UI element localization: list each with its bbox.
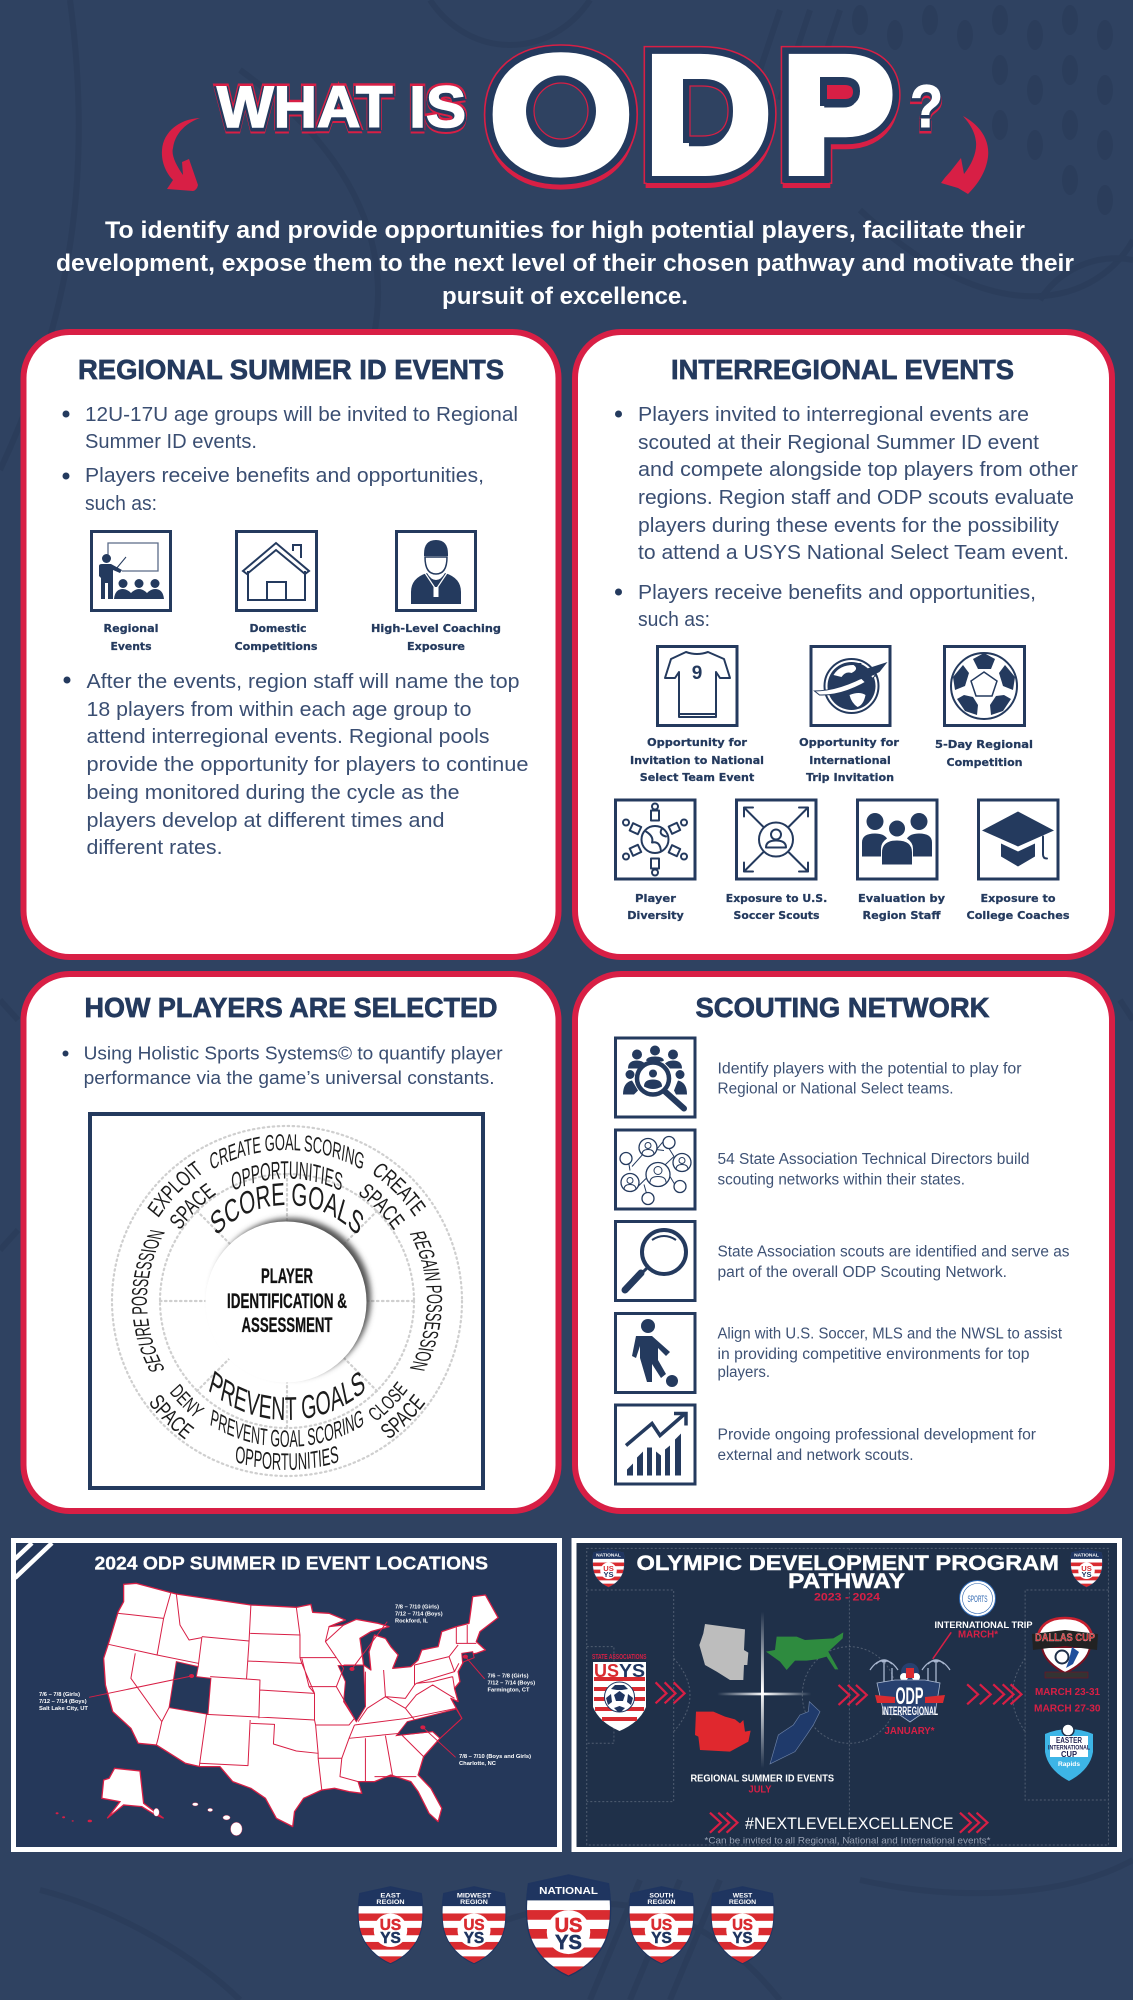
text: march dates: MARCH 23-31 — [1035, 1686, 1100, 1698]
badge: south region — [628, 1886, 695, 1964]
letter counters — [526, 76, 860, 146]
title: what is: WHAT IS — [217, 77, 466, 142]
diagram: player identification wheel — [88, 1112, 485, 1490]
label: 5-Day Regional — [935, 739, 1033, 751]
callout: salt lake city: 7/12 – 7/14 (Boys) — [39, 1699, 87, 1705]
badge: south region: US — [651, 1917, 672, 1934]
icon: regional events — [92, 532, 170, 610]
label: Exposure — [407, 641, 465, 653]
label: Exposure to — [980, 893, 1056, 905]
state associations shield: US — [594, 1661, 619, 1681]
ring labels: SPACE — [170, 1182, 216, 1228]
title: question mark: ? — [910, 73, 943, 140]
pathway title: PATHWAY — [788, 1570, 905, 1593]
label: College Coaches — [966, 910, 1070, 922]
callout: rockford: 7/8 – 7/10 (Girls) — [395, 1604, 439, 1610]
badge: national left — [592, 1549, 625, 1588]
title: ODP: P — [784, 25, 892, 204]
ring labels: OPPORTUNITIES — [232, 1161, 342, 1190]
bullet text — [62, 1044, 503, 1088]
ring labels: EXPLOIT — [147, 1160, 202, 1218]
ring labels: SPACE — [381, 1394, 426, 1438]
bullet text bottom: 18 players from within each age group to — [86, 698, 472, 721]
text — [718, 1426, 1036, 1464]
text: in providing competitive environments for top — [718, 1346, 1030, 1363]
ring labels — [132, 1134, 442, 1470]
bullet list: scouted at their Regional Summer ID event — [638, 431, 1039, 454]
label: Opportunity for — [799, 737, 900, 749]
badge: national — [525, 1874, 612, 1977]
bullet list top: such as: — [85, 492, 157, 515]
bullet text bottom: being monitored during the cycle as the — [86, 781, 460, 804]
title: ODP: O — [492, 25, 630, 204]
label — [858, 893, 945, 922]
callout: rockford: Rockford, IL — [395, 1618, 429, 1624]
logo: easter international cup: Rapids — [1058, 1761, 1080, 1768]
state associations shield: YS — [619, 1661, 645, 1681]
mission statement: To identify and provide opportunities for high potential players, facilitate their — [105, 217, 1025, 244]
heading: INTERREGIONAL EVENTS — [671, 354, 1014, 385]
bullet list: Players receive benefits and opportunities, — [638, 581, 1036, 604]
badge: midwest region: YS — [464, 1930, 484, 1947]
label: Region Staff — [862, 910, 941, 922]
bullet list: players during these events for the possibility — [638, 514, 1060, 537]
badge: national right: YS — [1081, 1570, 1092, 1579]
logo: easter international cup: CUP — [1061, 1750, 1078, 1759]
bullet list: and compete alongside top players from other — [638, 458, 1078, 481]
bullet list top: Players receive benefits and opportunities, — [85, 464, 484, 487]
icon: international trip — [811, 646, 890, 726]
heading: REGIONAL SUMMER ID EVENTS — [78, 354, 504, 385]
bullet text bottom: attend interregional events. Regional pools — [86, 725, 489, 748]
field lines and chevrons — [587, 1548, 1108, 1845]
bullet list: Players invited to interregional events are — [638, 403, 1029, 426]
badge: east region: YS — [380, 1930, 401, 1947]
label — [799, 737, 900, 784]
text: international trip: INTERNATIONAL TRIP — [934, 1620, 1032, 1630]
title: ODP — [492, 25, 892, 210]
badge: midwest region: MIDWEST — [457, 1892, 491, 1899]
ring labels: CREATE GOAL SCORING — [210, 1134, 364, 1168]
callout: farmington: 7/12 – 7/14 (Boys) — [488, 1680, 535, 1686]
text: march dates — [1034, 1686, 1101, 1714]
arrow: right — [941, 116, 988, 194]
bullet text bottom: After the events, region staff will name the top — [86, 670, 520, 693]
logo: easter international cup: EASTER — [1056, 1736, 1082, 1745]
badge: national left: US — [603, 1564, 614, 1573]
icon: player diversity — [616, 800, 695, 879]
bullet text bottom: players develop at different times and — [86, 809, 445, 832]
badge: west region — [710, 1886, 775, 1964]
icon: soccer ball — [944, 646, 1024, 726]
label: International — [809, 755, 891, 767]
ring labels: CLOSE — [369, 1381, 408, 1420]
label: Events — [110, 641, 152, 653]
icon: jersey — [658, 646, 737, 726]
icon: magnifying glass — [616, 1222, 695, 1300]
title: ODP: P — [784, 31, 892, 210]
US map — [56, 1583, 498, 1836]
ring labels: PREVENT GOALS — [209, 1370, 364, 1420]
title: ODP: D — [647, 25, 769, 204]
icon: high-level coaching — [396, 532, 476, 610]
title: ODP: D — [647, 25, 769, 204]
icon: player kicking — [616, 1314, 695, 1392]
mission statement: pursuit of excellence. — [442, 283, 688, 310]
text — [718, 1326, 1063, 1381]
logo: sports badge: SPORTS — [968, 1594, 988, 1604]
state associations shield — [592, 1654, 647, 1731]
title: ODP: P — [784, 25, 892, 204]
icon: exposure to scouts — [736, 800, 816, 879]
title: ODP: D — [647, 31, 769, 210]
date: 2023 - 2024 — [814, 1592, 881, 1604]
badge: east region: REGION — [376, 1899, 405, 1906]
title: question mark: ? — [910, 77, 943, 144]
text: regional summer id — [690, 1772, 834, 1796]
icon: identify players — [616, 1038, 695, 1117]
callout: charlotte: 7/8 – 7/10 (Boys and Girls) — [459, 1754, 531, 1760]
badge: west region: REGION — [729, 1899, 756, 1906]
logo: easter international cup: INTERNATIONAL — [1048, 1744, 1090, 1752]
title: ODP: D — [647, 25, 769, 204]
callout lines — [89, 1622, 485, 1757]
text — [718, 1151, 1030, 1188]
badge: midwest region: US — [463, 1917, 485, 1934]
ring labels: SPACE — [150, 1395, 194, 1440]
label: Competitions — [234, 641, 318, 653]
footnote: *Can be invited to all Regional, National and International events* — [704, 1836, 991, 1846]
text: regional summer id: REGIONAL SUMMER ID EVENTS — [690, 1772, 834, 1784]
heading: SCOUTING NETWORK — [696, 992, 990, 1023]
label — [935, 739, 1033, 769]
badge: national: US — [555, 1915, 582, 1937]
badge: south region: YS — [651, 1930, 672, 1947]
bullet text: performance via the game’s universal constants. — [84, 1068, 495, 1088]
text: Provide ongoing professional development for — [718, 1426, 1036, 1444]
logo: easter international cup — [1045, 1724, 1093, 1781]
title: question mark: ? — [910, 75, 943, 142]
state associations shield: STATE ASSOCIATIONS — [592, 1654, 647, 1661]
title: ODP: O — [492, 27, 630, 206]
ring labels: SPACE — [360, 1184, 406, 1230]
badge: national: YS — [555, 1932, 582, 1954]
text: march dates: MARCH 27-30 — [1034, 1702, 1101, 1714]
badge: east region: US — [380, 1917, 401, 1934]
text: 54 State Association Technical Directors build — [718, 1151, 1030, 1168]
corner stripe marks — [15, 1543, 52, 1578]
logo: odp interregional: ODP — [896, 1683, 924, 1710]
center text: PLAYER — [261, 1265, 313, 1288]
center text: IDENTIFICATION & — [227, 1290, 347, 1313]
label: Select Team Event — [640, 772, 754, 784]
region badges — [357, 1874, 775, 1977]
title: ODP: O — [492, 25, 630, 204]
label: Trip Invitation — [806, 772, 894, 784]
mission statement: development, expose them to the next level of their chosen pathway and motivate their — [56, 250, 1074, 277]
panel: olympic development program pathway — [574, 1540, 1120, 1850]
callout: salt lake city — [39, 1692, 89, 1712]
panel: regional summer id events — [24, 332, 558, 957]
callout: farmington: Farmington, CT — [488, 1688, 530, 1694]
label: Invitation to National — [630, 755, 764, 767]
icon: evaluation by region staff — [858, 800, 937, 879]
logo: dallas cup: DALLAS CUP — [1035, 1632, 1095, 1644]
badge: national: NATIONAL — [539, 1885, 599, 1897]
badge: south region: SOUTH — [649, 1892, 674, 1899]
badge: national left: NATIONAL — [596, 1553, 621, 1559]
bullet text bottom — [64, 670, 528, 859]
icon: scouting network — [616, 1130, 695, 1209]
label — [234, 623, 318, 653]
center text: ASSESSMENT — [242, 1314, 333, 1337]
bullet list: such as: — [638, 608, 710, 631]
badge: east region — [357, 1886, 424, 1964]
logo: dallas cup — [1032, 1618, 1098, 1678]
text: Align with U.S. Soccer, MLS and the NWSL to assist — [718, 1326, 1063, 1342]
title: what is: WHAT IS — [217, 79, 466, 144]
text: international trip — [934, 1620, 1032, 1640]
mission statement — [56, 217, 1074, 310]
panel: how players are selected — [20, 971, 562, 1514]
ring labels: OPPORTUNITIES — [236, 1446, 338, 1470]
logo: odp interregional — [870, 1660, 950, 1737]
ring labels: REGAIN POSSESSION — [410, 1231, 442, 1371]
callout: farmington: 7/6 – 7/8 (Girls) — [488, 1674, 529, 1680]
icon: domestic competitions — [236, 532, 316, 610]
label — [726, 893, 827, 922]
text — [718, 1244, 1070, 1281]
ring labels: DENY — [170, 1384, 205, 1416]
label — [966, 893, 1070, 922]
ring labels: CREATE — [374, 1164, 426, 1217]
badge: midwest region: REGION — [460, 1899, 488, 1906]
callout: charlotte — [459, 1754, 531, 1767]
title: what is: WHAT IS — [217, 75, 466, 140]
icon: jersey: 9 — [692, 663, 702, 684]
label: Exposure to U.S. — [726, 893, 827, 905]
bullet list top: Summer ID events. — [85, 430, 257, 453]
label: Diversity — [627, 910, 684, 922]
regional maps — [695, 1624, 843, 1764]
badge: east region: EAST — [380, 1892, 402, 1899]
icon: graduation cap — [978, 800, 1058, 879]
text: scouting networks within their states. — [718, 1172, 965, 1188]
text: international trip: MARCH* — [958, 1630, 998, 1640]
bullet text: Using Holistic Sports Systems© to quantify player — [84, 1044, 503, 1064]
badge: national right: NATIONAL — [1074, 1553, 1099, 1559]
bullet list: to attend a USYS National Select Team event. — [638, 541, 1069, 564]
text: Identify players with the potential to play for — [718, 1060, 1022, 1078]
badge: national right: US — [1081, 1564, 1092, 1573]
text: State Association scouts are identified and serve as — [718, 1244, 1070, 1260]
bullet list top — [62, 403, 518, 515]
title: ODP: O — [492, 31, 630, 210]
title: ODP: O — [492, 25, 630, 204]
icon: growth chart — [616, 1405, 695, 1484]
title: ODP: P — [784, 27, 892, 206]
text: Regional or National Select teams. — [718, 1080, 954, 1098]
map title: 2024 ODP SUMMER ID EVENT LOCATIONS — [94, 1554, 488, 1574]
pathway title: OLYMPIC DEVELOPMENT PROGRAM — [636, 1552, 1059, 1575]
title: ODP: D — [647, 27, 769, 206]
heading: HOW PLAYERS ARE SELECTED — [84, 992, 498, 1023]
ring labels: SECURE POSSESSION — [132, 1230, 165, 1372]
logo: odp interregional: JANUARY* — [884, 1726, 935, 1737]
logo: sports badge — [960, 1580, 996, 1616]
text — [718, 1060, 1022, 1098]
arrow: left — [162, 118, 200, 191]
hashtag: #NEXTLEVELEXCELLENCE — [745, 1814, 954, 1833]
callout: rockford: 7/12 – 7/14 (Boys) — [395, 1612, 443, 1618]
center text — [227, 1265, 347, 1337]
callout: farmington — [488, 1674, 535, 1694]
badge: west region: YS — [733, 1930, 752, 1947]
panel: 2024 summer id event locations map — [14, 1540, 560, 1850]
text: regional summer id: JULY — [748, 1784, 772, 1796]
label: Opportunity for — [647, 737, 748, 749]
badge: national right — [1070, 1549, 1103, 1588]
bullet list: regions. Region staff and ODP scouts evaluate — [638, 486, 1074, 509]
title: ODP: P — [784, 25, 892, 204]
callout: salt lake city: Salt Lake City, UT — [39, 1706, 89, 1712]
title: what is: WHAT IS — [217, 75, 466, 140]
pathway title — [636, 1552, 1059, 1593]
label: High-Level Coaching — [371, 623, 501, 635]
ring labels: SCORE GOALS — [211, 1182, 364, 1234]
callout: rockford — [395, 1604, 443, 1624]
label: Evaluation by — [858, 893, 945, 905]
label: Soccer Scouts — [734, 910, 820, 922]
text: players. — [718, 1364, 770, 1381]
badge: west region: WEST — [733, 1892, 752, 1899]
panel: interregional events — [575, 332, 1112, 957]
label — [104, 623, 158, 653]
badge: midwest region — [441, 1886, 507, 1964]
label: Player — [635, 893, 677, 905]
text: external and network scouts. — [718, 1447, 914, 1464]
bullet text bottom: provide the opportunity for players to continue — [86, 753, 528, 776]
label — [371, 623, 501, 653]
bullet list top: 12U-17U age groups will be invited to Regional — [85, 403, 518, 426]
label — [630, 737, 764, 784]
bullet text bottom: different rates. — [86, 836, 222, 859]
callout: salt lake city: 7/6 – 7/8 (Girls) — [39, 1692, 80, 1698]
label — [627, 893, 684, 922]
label: Regional — [104, 623, 158, 635]
ring labels: PREVENT GOAL SCORING — [210, 1410, 364, 1448]
title — [217, 25, 943, 210]
label: Domestic — [250, 623, 306, 635]
text: part of the overall ODP Scouting Network. — [718, 1264, 1007, 1281]
label: Competition — [946, 757, 1022, 769]
badge: south region: REGION — [647, 1899, 676, 1906]
badge: west region: US — [732, 1917, 753, 1934]
panel: scouting network — [575, 974, 1112, 1511]
badge: national left: YS — [603, 1570, 614, 1579]
logo: odp interregional: INTERREGIONAL — [882, 1704, 938, 1718]
callout: charlotte: Charlotte, NC — [459, 1761, 496, 1767]
bullet list — [615, 403, 1078, 631]
